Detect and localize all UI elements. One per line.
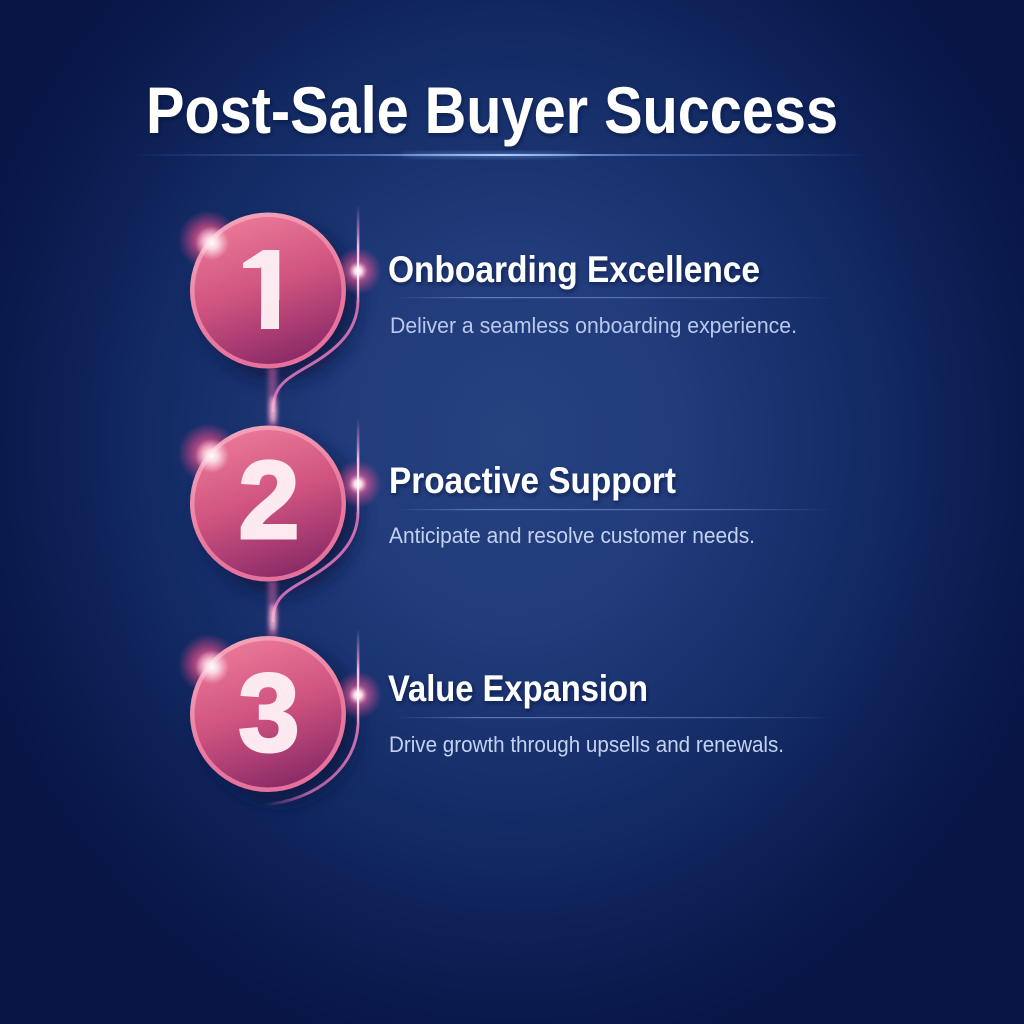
heading: Onboarding Excellence (388, 249, 760, 290)
highlight glow (178, 634, 238, 694)
flare (334, 236, 382, 306)
highlight glow (178, 423, 238, 483)
shadow (202, 225, 358, 381)
description: Drive growth through upsells and renewals. (389, 732, 784, 757)
number badge: 1 (237, 228, 298, 352)
flare (334, 660, 382, 730)
step 3 text (388, 668, 835, 757)
heading: Value Expansion (388, 668, 648, 709)
title: Post-Sale Buyer Success (146, 73, 838, 147)
step 2 (178, 418, 382, 638)
number badge: 2 (238, 439, 300, 562)
step 2 text (389, 460, 835, 548)
highlight glow (178, 210, 238, 270)
description: Anticipate and resolve customer needs. (389, 523, 755, 548)
shadow (202, 438, 358, 594)
shadow (202, 648, 358, 804)
connector: step 2 to step 3 (268, 418, 359, 638)
step 1 text (388, 249, 835, 338)
number badge (190, 426, 346, 582)
number badge (190, 212, 346, 368)
flare (334, 449, 382, 519)
number badge: 3 (238, 652, 300, 775)
heading: Proactive Support (389, 460, 676, 501)
step 1 (178, 205, 382, 427)
number badge (190, 636, 346, 792)
title underline (130, 152, 870, 158)
connector: step 1 to step 2 (268, 205, 359, 427)
connector tail (263, 628, 359, 805)
description: Deliver a seamless onboarding experience. (390, 313, 797, 338)
step 3 (178, 628, 382, 805)
